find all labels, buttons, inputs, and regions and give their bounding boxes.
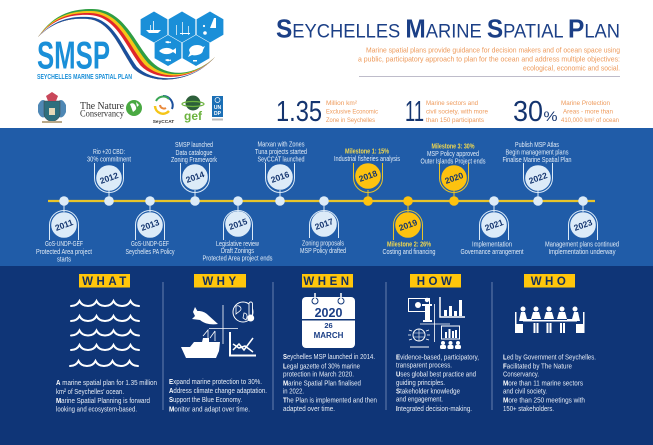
logo: SeyCCAT: SeyCCAT <box>153 119 174 125</box>
milestone 2011 <box>36 196 92 264</box>
milestone 2016 <box>255 140 307 206</box>
milestone 2013: 2013 <box>139 217 161 233</box>
stat: 30% <box>513 96 619 128</box>
milestone 2020: MSP Policy approved <box>427 149 479 158</box>
milestone 2014: 2014 <box>184 169 206 185</box>
text: why description: Expand marine protection to 30%. <box>169 377 262 386</box>
logo: UNDP: UN <box>214 105 221 111</box>
milestone 2022 <box>502 140 572 206</box>
stat: 30%: Areas - more than <box>563 108 613 116</box>
milestone 2021: Implementation <box>472 240 512 248</box>
milestone 2017 <box>300 196 346 255</box>
logo: UNDP <box>212 96 223 120</box>
stat: 1.35 million km2: Exclusive Economic <box>326 108 379 116</box>
panel: how: HOW <box>417 276 455 288</box>
milestone 2015: 2015 <box>227 216 249 232</box>
milestone 2018 <box>334 146 400 206</box>
stat: 1.35 million km2 <box>276 96 379 128</box>
text: when description: The Plan is implemented and then <box>283 396 377 404</box>
milestone 2021 <box>460 196 524 256</box>
text: what description: A marine spatial plan for 1.35 million <box>56 378 157 387</box>
text: who description: Facilitated by The Nature <box>503 362 572 370</box>
milestone 2021: Governance arrangement <box>460 247 524 256</box>
text: when description: protection in March 2020. <box>283 370 354 378</box>
milestone 2021: 2021 <box>483 217 505 233</box>
milestone 2018: Industrial fisheries analysis <box>334 154 400 163</box>
milestone 2013: Seychelles PA Policy <box>126 247 175 256</box>
milestone 2019: Costing and financing <box>382 247 436 256</box>
intro text: Marine spatial plans provide guidance for decision makers and of ocean space using <box>366 46 620 54</box>
milestone 2017: Zoning proposals <box>302 238 344 248</box>
text: why description: Address climate change adaptation. <box>169 386 267 395</box>
milestone 2011: Protected Area project <box>36 247 92 256</box>
text: why description: Support the Blue Economy. <box>169 395 242 404</box>
milestone 2012: Rio +20 CBD: <box>93 147 125 156</box>
stat: 1.35 million km2: Million km² <box>326 100 358 107</box>
icon: meeting table <box>515 306 584 333</box>
text: how description: transparent process. <box>396 360 452 370</box>
text: how description <box>396 352 479 413</box>
milestone 2016: 2016 <box>269 169 291 185</box>
intro text: ecological, economic and social. <box>523 64 620 72</box>
text: who description: More than 250 meetings with <box>503 396 585 404</box>
milestone 2015: Legislative review <box>216 239 260 248</box>
text: who description: and civil society. <box>503 386 547 396</box>
text: why description: Monitor and adapt over time. <box>169 404 250 414</box>
milestone 2020 <box>420 142 486 206</box>
logo: UNDP: DP <box>214 111 222 117</box>
text: when description: adapted over time. <box>283 404 335 413</box>
milestone 2019 <box>382 196 436 256</box>
icon: calendar: MARCH <box>314 331 344 340</box>
panel: who: WHO <box>531 276 569 288</box>
title: SEYCHELLES MARINE SPATIAL PLAN <box>276 14 620 44</box>
milestone 2017: MSP Policy drafted <box>300 246 346 255</box>
milestone 2020: 2020 <box>443 170 465 186</box>
text: how description: Stakeholder knowledge <box>396 386 460 396</box>
panel: when: WHEN <box>303 276 353 288</box>
milestone 2012: 30% commitment <box>87 154 131 164</box>
panel: bottom background <box>0 266 653 445</box>
milestone 2020: Milestone 3: 30% <box>432 142 475 150</box>
milestone 2015 <box>202 196 273 262</box>
text: when description: Marine Spatial Plan finalised <box>283 378 361 388</box>
icon: why collage <box>181 302 256 358</box>
milestone 2022: 2022 <box>527 170 549 186</box>
milestone 2011: 2011 <box>54 217 75 233</box>
text: who description: Conservancy. <box>503 370 539 378</box>
stat: 11 sectors: 11 <box>405 96 424 128</box>
milestone 2019: Milestone 2: 26% <box>387 240 431 248</box>
text: what description: km² of Seychelles' ocean. <box>56 387 124 396</box>
stat: 30%: % <box>544 108 558 124</box>
intro text: a public, participatory approach to plan for the ocean and address multiple objectives: <box>358 54 620 64</box>
logo: GEF: gef <box>184 109 203 123</box>
stat: 30%: Marine Protection <box>561 100 610 107</box>
stat: 11 sectors: than 150 participants <box>426 117 485 124</box>
logo: SeyCCAT <box>153 96 174 125</box>
milestone 2016: Tuna projects started <box>255 147 307 156</box>
panel: what <box>56 274 157 414</box>
panel: how <box>396 274 479 413</box>
milestone 2019: 2019 <box>397 217 419 233</box>
milestone 2017: 2017 <box>313 216 335 232</box>
text: when description: in 2022. <box>283 386 304 396</box>
intro text <box>358 46 620 72</box>
panel: what: WHAT <box>82 276 130 288</box>
stat: 30%: 410,000 km² of ocean <box>561 117 619 124</box>
stat: 1.35 million km2: 1.35 <box>276 96 322 128</box>
milestone 2016: Marxan with Zones <box>258 140 305 148</box>
text: when description <box>283 352 377 413</box>
text: who description: 150+ stakeholders. <box>503 404 554 413</box>
milestone 2014: Data catalogue <box>176 148 212 157</box>
logo: SMSP: SMSP <box>37 34 110 78</box>
milestone 2015: Draft Zonings <box>221 246 254 255</box>
text: when description: Legal gazette of 30% marine <box>283 362 360 370</box>
logo: Seychelles coat of arms <box>38 92 66 123</box>
milestone 2016: SeyCCAT launched <box>258 154 304 164</box>
text: how description: guiding principles. <box>396 378 445 387</box>
panel: timeline <box>0 128 653 266</box>
panel: when <box>283 274 377 413</box>
milestone 2014 <box>171 140 217 206</box>
logo: The Nature Conservancy <box>80 100 142 118</box>
panel: why <box>169 274 267 414</box>
stat: 30%: 30 <box>513 96 543 128</box>
text: who description: More than 11 marine sectors <box>503 378 583 388</box>
milestone 2012: 2012 <box>98 170 120 186</box>
stat: 1.35 million km2: Zone in Seychelles <box>326 117 376 124</box>
icon: calendar <box>302 293 355 348</box>
text: what description: looking and ecosystem-based. <box>56 404 137 414</box>
text: what description <box>56 378 157 414</box>
milestone 2018: 2018 <box>357 168 379 184</box>
stat: 11 sectors: Marine sectors and <box>426 100 478 107</box>
milestone 2023: Management plans continued <box>545 240 619 248</box>
text: when description: Seychelles MSP launched in 2014. <box>283 352 375 361</box>
text: how description: Uses global best practice and <box>396 370 476 378</box>
milestone 2022: Publish MSP Atlas <box>515 140 559 149</box>
icon: calendar: 2020 <box>315 306 342 320</box>
text: who description <box>503 352 596 413</box>
logo: The Nature Conservancy: Conservancy <box>80 108 124 118</box>
icon: calendar: 26 <box>324 321 333 330</box>
milestone 2011: starts <box>57 254 71 264</box>
text: how description: Integrated decision-making. <box>396 404 472 413</box>
milestone 2014: SMSP launched <box>175 140 213 149</box>
milestone 2015: Protected Area project ends <box>202 254 273 262</box>
stat: 11 sectors: civil society, with more <box>426 108 488 116</box>
stat: 11 sectors <box>405 96 488 128</box>
milestone 2012 <box>87 147 131 206</box>
text: how description: Evidence-based, participatory, <box>396 352 479 362</box>
panel: why: WHY <box>202 276 240 288</box>
text: who description: Led by Government of Seychelles. <box>503 352 596 362</box>
milestone 2014: Zoning Framework <box>171 155 217 164</box>
milestone 2020: Outer Islands Project ends <box>420 156 486 166</box>
logo: SMSP <box>37 9 223 81</box>
milestone 2013 <box>126 196 175 256</box>
icon: how collage <box>408 297 465 349</box>
milestone 2018: Milestone 1: 15% <box>345 146 389 156</box>
milestone 2011: GoS-UNDP-GEF <box>45 239 83 248</box>
logo: SMSP: SEYCHELLES MARINE SPATIAL PLAN <box>37 72 132 81</box>
milestone 2023: 2023 <box>572 217 594 233</box>
logo: GEF <box>182 96 204 123</box>
panel: who <box>503 274 596 413</box>
text: why description <box>169 377 267 414</box>
milestone 2022: Finalise Marine Spatial Plan <box>502 155 572 164</box>
milestone 2013: GoS-UNDP-GEF <box>131 239 169 248</box>
logo: The Nature Conservancy: The Nature <box>80 101 125 112</box>
milestone 2023 <box>545 196 619 256</box>
text: what description: Marine Spatial Planning is forward <box>56 396 150 405</box>
milestone 2023: Implementation underway <box>548 247 616 256</box>
milestone 2022: Begin management plans <box>506 148 569 156</box>
text: how description: and engagement. <box>396 394 443 404</box>
icon: waves <box>70 301 139 366</box>
